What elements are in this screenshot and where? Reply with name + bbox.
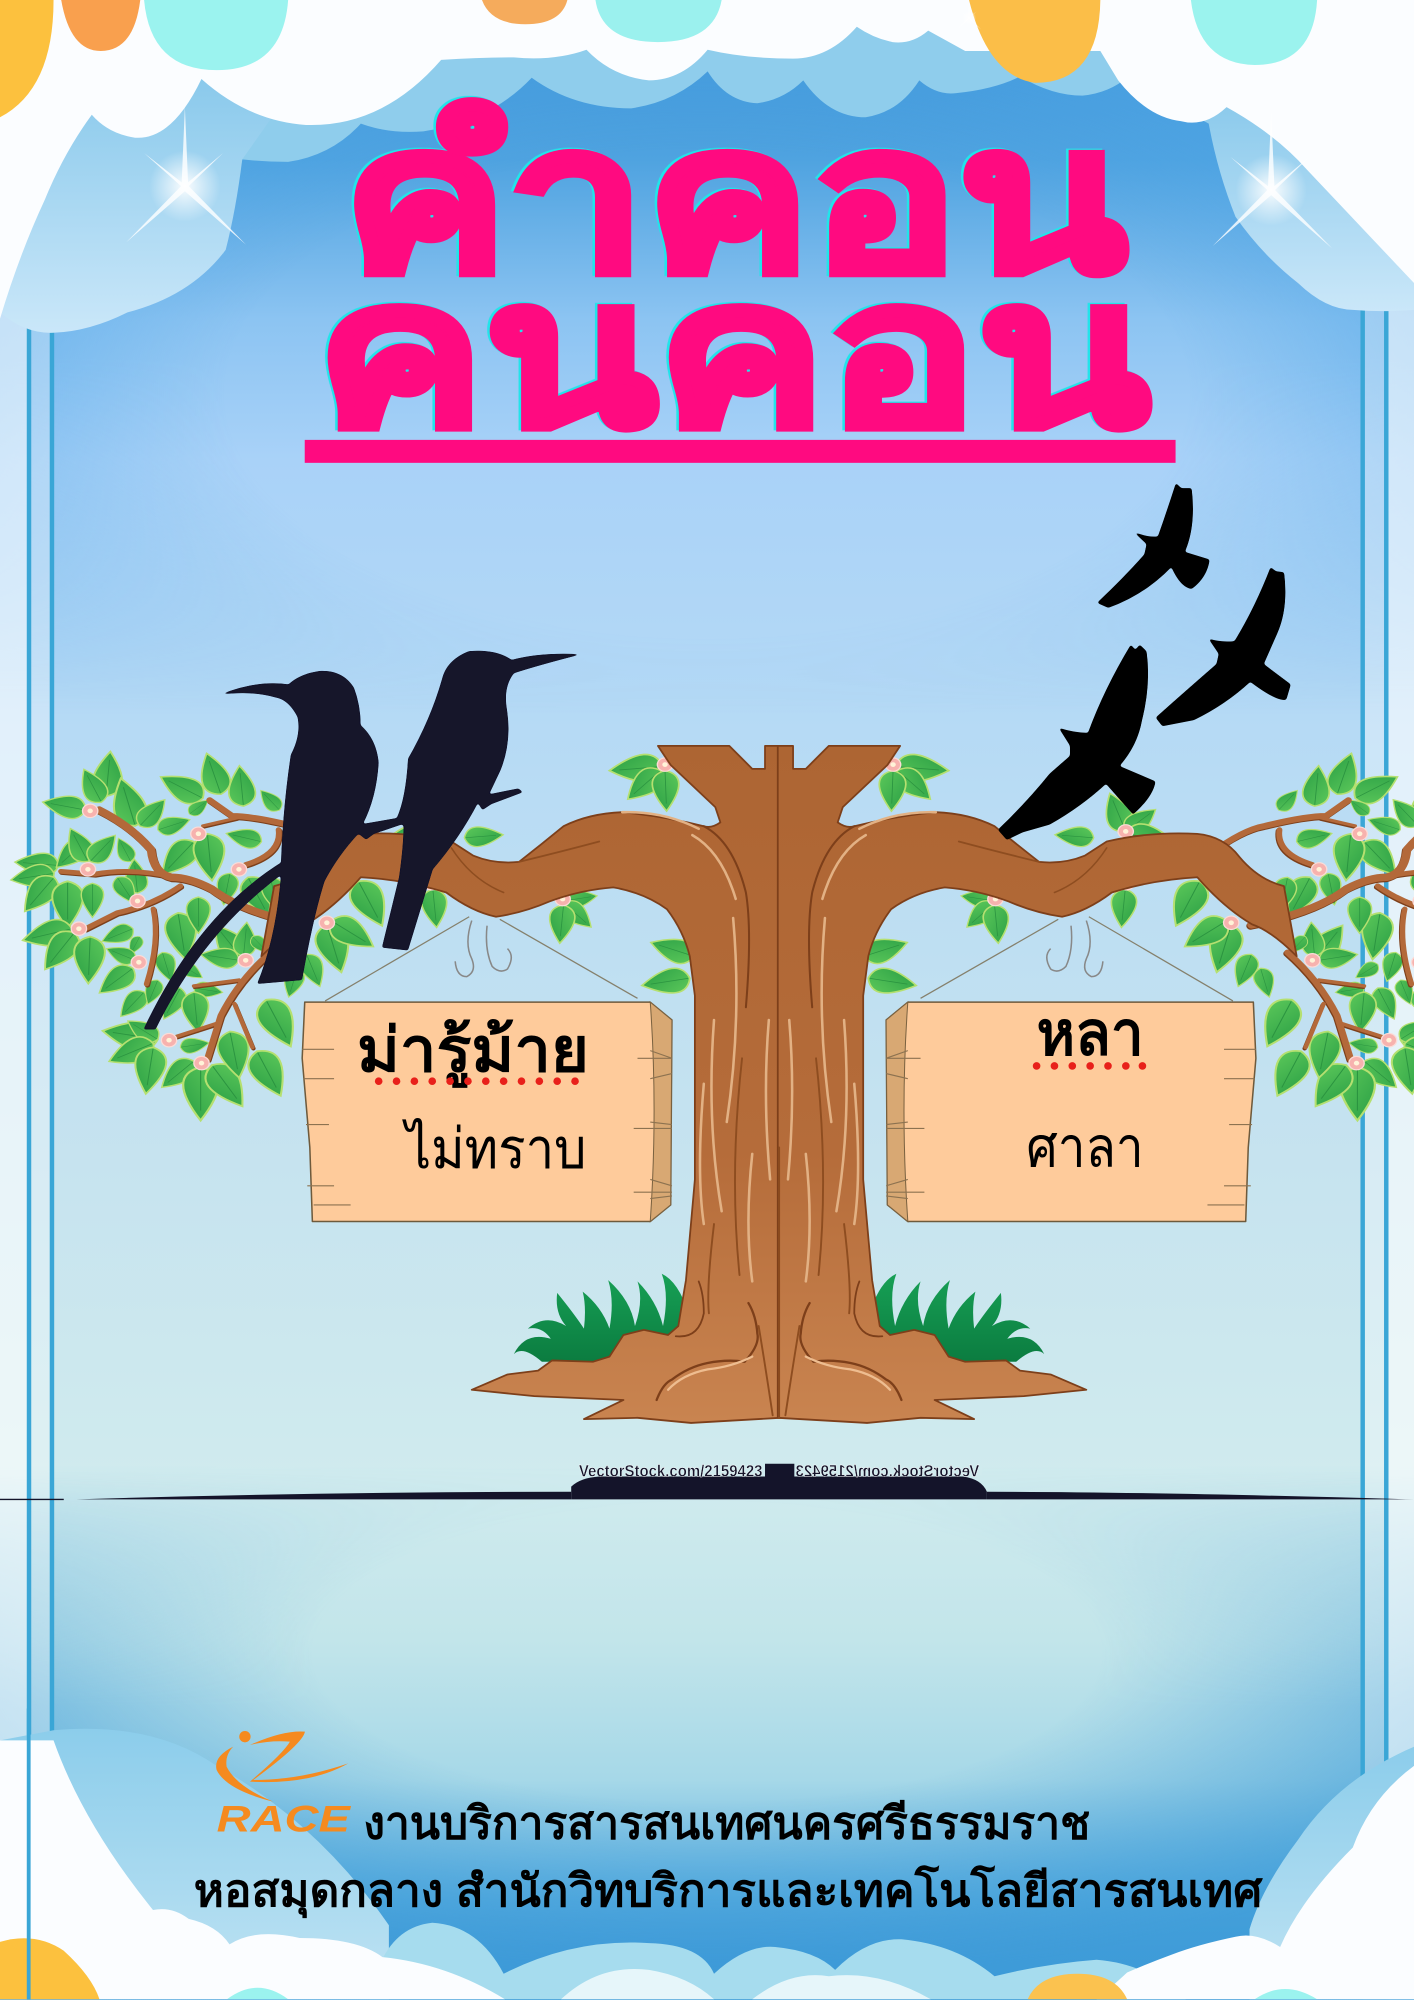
flying birds silhouette bbox=[998, 483, 1291, 840]
sign right dots bbox=[1033, 1062, 1146, 1070]
footer line 1: งานบริการสารสนเทศนครศรีธรรมราช bbox=[363, 1800, 1090, 1849]
hanging sign right bbox=[886, 917, 1256, 1221]
bird right bbox=[382, 651, 582, 950]
footer line 2: หอสมุดกลาง สำนักวิทบริการและเทคโนโลยีสารสนเทศ bbox=[194, 1864, 1263, 1919]
tree trunk left half bbox=[261, 746, 780, 1423]
top clouds: white layer bbox=[0, 0, 1414, 319]
bottom left curtain bbox=[0, 1729, 389, 1999]
tree trunk right half bbox=[778, 746, 1297, 1423]
sign left meaning: ไม่ทราบ bbox=[402, 1117, 587, 1180]
top balloons bbox=[0, 0, 1317, 117]
sign left heading: ม่ารู้ม้าย bbox=[357, 1016, 589, 1088]
top clouds: light blue scallops bbox=[223, 0, 1128, 255]
title underline bbox=[305, 440, 1176, 463]
lower vignette bbox=[0, 1466, 1414, 2000]
logo wordmark: RACE bbox=[217, 1798, 351, 1840]
sparkle left bbox=[126, 107, 246, 245]
tree foliage right bbox=[859, 750, 1414, 1120]
bird left bbox=[220, 671, 404, 984]
watermark text: VectorStock.com/2159423 bbox=[579, 1461, 762, 1480]
bottom balloons bbox=[0, 1938, 1317, 1999]
flying bird right bbox=[1156, 567, 1291, 726]
bottom right curtain bbox=[1250, 1747, 1414, 1999]
sparkle right bbox=[1213, 111, 1332, 249]
left outer border over clouds bbox=[27, 1709, 31, 1999]
tree foliage left bbox=[9, 750, 699, 1120]
flying bird large bbox=[998, 645, 1156, 840]
bottom scallop humps bbox=[370, 1923, 1186, 1999]
perched birds silhouette bbox=[143, 651, 582, 1030]
bird left tail bbox=[143, 861, 284, 1030]
sign right meaning: ศาลา bbox=[1026, 1116, 1144, 1179]
upper vignette bbox=[0, 231, 1414, 676]
flying bird top bbox=[1097, 483, 1210, 608]
grass right bbox=[870, 1274, 1044, 1362]
left curtain bbox=[0, 51, 319, 333]
ground horizon line and shadow bbox=[0, 1464, 1414, 1500]
grass left bbox=[514, 1274, 689, 1362]
sparkle top bbox=[957, 2, 981, 30]
bottom white clouds middle bbox=[561, 1969, 931, 1999]
sign right heading: หลา bbox=[1037, 999, 1144, 1067]
mirrored watermark text: VectorStock.com/2159423 bbox=[796, 1461, 979, 1480]
right curtain bbox=[1122, 77, 1414, 311]
logo swoosh bbox=[216, 1731, 348, 1802]
hanging sign left bbox=[302, 917, 672, 1221]
bottom white clouds right bbox=[1097, 1766, 1414, 1999]
bottom white clouds left bbox=[0, 1740, 505, 1999]
sign left dots bbox=[375, 1077, 579, 1085]
logo: RACE bbox=[216, 1731, 351, 1840]
title line 2: คนคอน bbox=[316, 241, 1150, 469]
title line 1: คำคอน bbox=[343, 86, 1127, 314]
